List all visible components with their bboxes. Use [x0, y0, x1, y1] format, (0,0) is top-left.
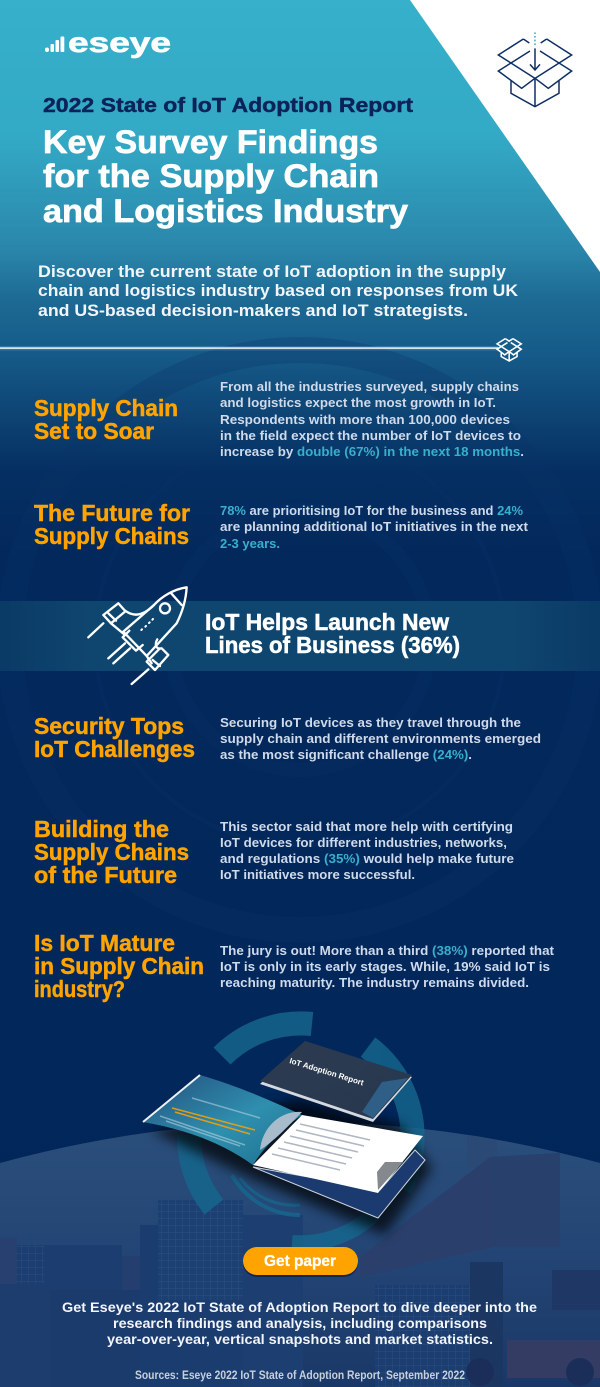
heading: The Future for: [34, 500, 190, 526]
report shadow: [150, 1100, 432, 1235]
section: is iot mature: [34, 930, 555, 1002]
heading: Is IoT Mature: [34, 930, 175, 956]
heading: in Supply Chain: [34, 953, 204, 979]
section: supply chain set to soar: [34, 379, 524, 459]
body text: This sector said that more help with certifying: [220, 819, 513, 834]
heading: [34, 713, 195, 762]
title: [43, 124, 408, 229]
heading: Supply Chains: [34, 839, 189, 865]
footer hill with containers: [0, 1122, 600, 1387]
background rings: [10, 350, 590, 930]
body text: From all the industries surveyed, supply chains: [220, 379, 519, 394]
heading: [34, 500, 190, 549]
white corner triangle: [410, 0, 600, 272]
report left page: [143, 1075, 302, 1165]
intro paragraph: Discover the current state of IoT adoption in the supply: [38, 262, 507, 281]
intro paragraph: and US-based decision-makers and IoT strategists.: [38, 301, 468, 320]
teal rings behind report: [189, 1023, 413, 1243]
body text: reaching maturity. The industry remains divided.: [220, 975, 529, 990]
heading: Building the: [34, 816, 169, 842]
heading: Security Tops: [34, 713, 184, 739]
heading: IoT Challenges: [34, 736, 195, 762]
banner: new lines of business: [0, 587, 600, 684]
heading: Supply Chains: [34, 523, 189, 549]
container stacks left: [0, 1200, 303, 1387]
body text: as the most significant challenge (24%).: [220, 747, 472, 762]
icon: open box: [498, 32, 572, 107]
report cover: [260, 1041, 412, 1122]
report right page: [253, 1115, 423, 1193]
body text: 2-3 years.: [220, 536, 280, 551]
title: Key Survey Findings: [43, 124, 378, 160]
body text: Respondents with more than 100,000 devices: [220, 412, 510, 427]
report back page: [253, 1150, 425, 1218]
closing paragraph: year-over-year, vertical snapshots and market statistics.: [107, 1332, 493, 1348]
banner text: IoT Helps Launch New: [205, 609, 449, 635]
body text: IoT is only in its early stages. While, 19% said IoT is: [220, 959, 550, 974]
body text: and logistics expect the most growth in IoT.: [220, 395, 496, 410]
body text: increase by double (67%) in the next 18 months.: [220, 444, 524, 459]
body text: [220, 379, 524, 459]
heading: industry?: [34, 976, 125, 1002]
intro paragraph: [38, 262, 519, 320]
body text: [220, 503, 529, 551]
section: the future for supply chains: [34, 500, 529, 551]
divider with box icon: [0, 339, 521, 361]
report cover: IoT Adoption Report: [288, 1056, 365, 1088]
body text: are planning additional IoT initiatives in the next: [220, 519, 529, 534]
heading: [34, 930, 204, 1002]
closing paragraph: [62, 1300, 537, 1348]
heading: [34, 816, 189, 888]
button: get paper: [243, 1247, 358, 1277]
title: for the Supply Chain: [43, 158, 379, 194]
section: building the supply chains of the future: [34, 816, 514, 888]
title: and Logistics Industry: [43, 193, 408, 229]
intro paragraph: chain and logistics industry based on responses from UK: [38, 281, 519, 300]
logo wordmark: eseye: [68, 27, 171, 58]
body text: The jury is out! More than a third (38%) reported that: [220, 943, 555, 958]
logo: [45, 27, 171, 58]
heading: Supply Chain: [34, 395, 178, 421]
body text: 78% are prioritising IoT for the business and 24%: [220, 503, 523, 518]
body text: in the field expect the number of IoT devices to: [220, 428, 521, 443]
body text: IoT initiatives more successful.: [220, 867, 415, 882]
report mock-up: [143, 1041, 432, 1235]
body text: supply chain and different environments emerged: [220, 731, 541, 746]
closing paragraph: Get Eseye's 2022 IoT State of Adoption Report to dive deeper into the: [62, 1300, 537, 1316]
icon: rocket: [88, 587, 187, 684]
banner text: Lines of Business (36%): [205, 632, 460, 658]
logo signal bars: [45, 36, 64, 52]
body text: Securing IoT devices as they travel through the: [220, 715, 521, 730]
body text: [220, 819, 514, 882]
heading: of the Future: [34, 862, 177, 888]
body text: [220, 943, 555, 990]
button: get paper: Get paper: [264, 1253, 336, 1270]
subtitle: 2022 State of IoT Adoption Report: [43, 94, 413, 117]
sources: Sources: Eseye 2022 IoT State of Adoption Report, September 2022: [135, 1370, 465, 1382]
shipping container on forklift: [360, 1128, 600, 1387]
heading: [34, 395, 178, 444]
body text: and regulations (35%) would help make future: [220, 851, 514, 866]
section: security tops iot challenges: [34, 713, 541, 762]
closing paragraph: research findings and analysis, including comparisons: [113, 1316, 487, 1332]
banner strip: [0, 601, 600, 671]
body text: IoT devices for different industries, networks,: [220, 835, 507, 850]
banner text: [205, 609, 460, 658]
body text: [220, 715, 541, 762]
heading: Set to Soar: [34, 418, 154, 444]
